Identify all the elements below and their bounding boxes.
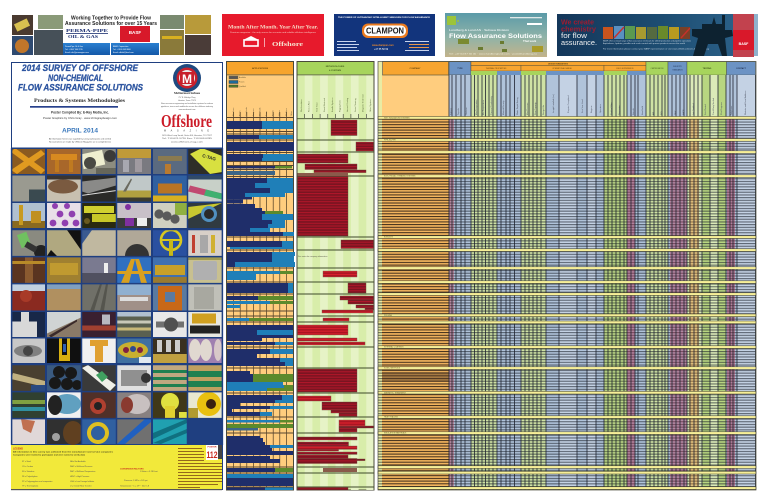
banner: BASF chemistry advert: Asphaltene, hydrate, paraffin and scale control with proven products across the world: [603, 42, 685, 45]
table section labels: [384, 116, 416, 435]
banner: BASF chemistry advert: chemistry: [561, 24, 597, 34]
orange chart key: Proven: [239, 80, 244, 84]
conversion factors: 1 Meter = 3.28 Feet: [140, 470, 158, 473]
banner: BASF chemistry advert: assurance.: [561, 40, 597, 47]
date: APRIL 2014: [62, 128, 98, 134]
legend abbreviations: HPHT = High Pressure: [70, 475, 89, 478]
table header: orange groups: FIELD EXPERIENCE: [616, 68, 634, 70]
orange chart bars: blue tails: [227, 121, 295, 490]
photo row 5: [11, 257, 222, 283]
table vertical grid: [449, 75, 756, 490]
banner: Perma-Pipe and BASF advert: Tel: +1 800 543 8800: [113, 49, 131, 51]
orange chart bars: navy and blue rows: [227, 121, 294, 490]
green chart column labels: [300, 94, 372, 112]
table outer border: [378, 62, 756, 490]
logo: Offshore magazine: Tel: 713.621.9720 Fax: 713.963.6285: [162, 138, 212, 140]
orange chart column labels: Spools: [273, 110, 275, 116]
table column labels: Length Installed (km): [552, 94, 555, 113]
green chart column labels: Direct Electrical: [323, 98, 326, 112]
orange chart header: [227, 62, 293, 75]
photo row 8: [11, 338, 222, 363]
disclaimer: No warranties are made by Offshore Magazine as to completeness: [49, 141, 111, 144]
table column labels: Flow Capacity: [534, 102, 537, 115]
table header: green and blue sub groups: [471, 71, 646, 75]
table header: right groups: STANDARDS: [672, 68, 684, 72]
logo: sponsor badge: www.mcdermott.com: [179, 108, 196, 111]
green chart column labels: Internal Coating: [346, 98, 349, 112]
table header: orange groups: OPERATIONAL RANGE: [552, 67, 573, 70]
orange chart column labels: Jumpers: [253, 108, 255, 116]
conversion factors: [120, 468, 158, 488]
table column labels: Third-Party Verified: [712, 98, 715, 115]
heading: survey title: NON-CHEMICAL: [48, 73, 103, 83]
banner: Offshore magazine advert: [222, 14, 324, 56]
banner: Perma-Pipe and BASF advert: PERMA-PIPE: [66, 28, 108, 33]
table column labels: Projects Completed: [567, 96, 570, 113]
legend abbreviations: [22, 460, 95, 488]
banner: ClampOn advert: [334, 14, 435, 56]
table column labels: Min Temperature: [482, 99, 485, 115]
green chart column labels: Magnetic Treatment: [362, 94, 365, 112]
table column labels: Max Pressure: [527, 102, 529, 115]
poster credits: [43, 110, 117, 120]
logo: Offshore magazine: MAGAZINE: [164, 130, 209, 132]
banner: Flow Assurance Solutions advert: Lundberg & Lund AS · Subsea Division: [449, 29, 510, 32]
disclaimer: All information herein was supplied by survey participants and verified: [49, 138, 111, 140]
legend abbreviations: WHP = Wellhead Pressure: [70, 465, 92, 468]
table column labels: Onshore: [466, 106, 468, 115]
table column labels: Subsea: [450, 107, 452, 115]
poster credits: Poster Compiled By: E-Ray Media, Inc.: [51, 110, 109, 114]
table section labels: BUNDLES: [384, 237, 394, 239]
orange chart column labels: Umbilicals: [246, 107, 248, 116]
green chart red bars: [298, 120, 374, 490]
banner: BASF chemistry advert: [557, 14, 758, 57]
logo: sponsor badge: 757 N. Eldridge Pkwy: [178, 97, 196, 99]
orange chart key: [229, 76, 246, 88]
logo: Offshore magazine: 1455 West Loop South, Suite 400, Houston, TX 77027: [162, 134, 212, 137]
legend abbreviations: U = Overall Heat Transfer: [70, 484, 92, 488]
table column labels: Field Tested: [704, 104, 707, 115]
banner: Perma-Pipe and BASF advert: BASF Corporation: [113, 45, 128, 48]
logo: sponsor badge: Flow assurance engineering and installation systems for subsea: [161, 102, 213, 105]
orange chart column labels: Other: [290, 111, 293, 116]
table header: orange groups: THERMAL PROPERTIES: [486, 67, 507, 70]
legend abbreviations: ST = Steel: [22, 460, 31, 463]
table column labels: Operators: [599, 104, 602, 113]
logo: sponsor badge: pipelines, risers and umbilicals across the offshore industry: [161, 105, 213, 108]
table header: right groups: [646, 62, 756, 75]
panel: comparison table: [378, 62, 756, 490]
legend heading: LEGEND: [13, 448, 23, 450]
green chart section dividers: [297, 119, 374, 487]
green chart header: & SYSTEMS: [329, 70, 342, 72]
notes column: [178, 448, 222, 488]
photo row 9: [11, 365, 222, 391]
legend notes: [13, 450, 113, 456]
photo row 10: [11, 392, 222, 418]
table column labels: First Year Used: [581, 99, 584, 113]
banner: BASF chemistry advert: BASF offers a broad range of flow assurance chemicals for oilfield production and pipeline operations: [603, 40, 691, 43]
table row label column: [378, 62, 449, 490]
table header: right groups: CERTIFICATION: [651, 67, 664, 70]
table section labels: MAGNETIC TREATMENT: [384, 391, 407, 394]
table column labels: Topside: [458, 107, 460, 115]
photo row 11: [11, 419, 187, 445]
table header: company: COMPANY: [409, 67, 421, 70]
orange chart column labels: [233, 107, 293, 116]
banner: Flow Assurance Solutions advert: That work: [523, 39, 537, 43]
table column labels: Shallow Water: [610, 102, 613, 115]
table column labels: Max Temperature: [475, 99, 478, 115]
table section labels: SONIC METHODS: [384, 368, 401, 370]
green chart note: See notes for company information: [298, 255, 327, 258]
photo row 7: [11, 312, 222, 338]
table section labels: PIGGING: [384, 315, 393, 317]
panel: poster cover: [11, 62, 223, 490]
table column labels: Material Density: [502, 101, 505, 115]
table columns: [449, 75, 756, 490]
poster number: 112: [206, 449, 218, 460]
table section labels: HEAT TRACING: [384, 416, 398, 419]
photo row 4: [11, 230, 222, 259]
logo: Offshore magazine: [161, 111, 212, 143]
heading: survey title: FLOW ASSURANCE SOLUTIONS: [18, 82, 144, 92]
green chart header: METHODOLOGIES: [326, 66, 345, 68]
table section labels: INTERNAL COATINGS: [384, 346, 404, 349]
banner: Perma-Pipe and BASF advert: Email: info@permapipe.com: [65, 51, 89, 54]
table column labels: New Build: [642, 106, 644, 115]
green chart muted rows: [298, 173, 357, 472]
table column labels: Website and Email Address: [744, 91, 747, 115]
green chart column labels: Other Systems: [369, 99, 372, 112]
banner: Perma-Pipe and BASF advert: Email: oilfield@basf.com: [113, 52, 134, 54]
photo row 2: [11, 176, 222, 202]
banner: ClampOn advert: THE POWER OF ULTRASONIC INTELLIGENT SENSORS FOR FLOW ASSURANCE: [338, 16, 431, 19]
green chart ticks: [305, 114, 366, 118]
table column labels: Regions: [591, 106, 593, 113]
table column labels: [450, 91, 747, 115]
banner: BASF chemistry advert: BASF: [739, 42, 749, 46]
table header: first blue group: [449, 62, 471, 75]
conversion factors: Pressure: 1 MPa = 145 psi: [124, 480, 148, 482]
orange chart column labels: Wellbore: [286, 107, 288, 116]
orange chart key: Available: [239, 76, 246, 79]
banner: Perma-Pipe and BASF advert: PermaPipe Oil & Gas: [65, 45, 83, 48]
banner: BASF chemistry advert: for flow: [561, 33, 588, 40]
table row stripes: [449, 118, 756, 490]
photo row 3: [11, 203, 222, 228]
orange chart bars: slate rows: [227, 171, 275, 430]
banner: Perma-Pipe and BASF advert: BASF: [129, 30, 141, 35]
photo row 1: [11, 148, 222, 174]
table column labels: Pilot Programs: [720, 102, 723, 115]
green chart column stripes: [305, 75, 374, 490]
conversion factors: CONVERSION FACTORS: [120, 468, 144, 470]
banner: Flow Assurance Solutions advert: Tel: +47 64 87 56 00 · www.lundberglund.com · post@lundberg.no: [449, 52, 538, 56]
table column labels: Design Life: [543, 104, 545, 115]
banner: Perma-Pipe and BASF advert: Assurance Solutions for over 15 Years: [65, 21, 157, 27]
orange chart column labels: Manifolds: [259, 107, 261, 116]
legend abbreviations: PE = Polyethylene: [22, 475, 38, 478]
heading: survey title: [18, 63, 144, 92]
green chart column labels: Bundle Systems: [331, 98, 334, 112]
legend abbreviations: PP = Polypropylene and composites: [22, 480, 52, 483]
panel: orange chart: [226, 62, 295, 490]
poster number: [206, 445, 222, 460]
legend abbreviations: CS = Carbon: [22, 465, 33, 468]
table section labels: WET INSULATION SYSTEMS: [384, 116, 410, 119]
table column labels: Deepwater: [618, 105, 621, 115]
photo row 1: C-TAG: [202, 153, 217, 162]
disclaimer: [49, 138, 111, 144]
table column labels: Retrofit: [632, 108, 635, 115]
legend notes: Companies were invited to participate and were asked to verify data: [13, 454, 86, 456]
green chart column labels: Wet Insulation: [300, 99, 303, 112]
banner: ClampOn advert: www.clampon.com: [372, 44, 394, 47]
banner: ClampOn advert: +47 55 58 99: [374, 48, 389, 51]
table header: orange groups: [471, 62, 646, 71]
orange chart key: Qualified: [239, 86, 246, 88]
table header: first blue group: TYPE: [457, 68, 463, 70]
table header: right groups: INDUSTRY: [673, 66, 683, 68]
banner: Flow Assurance Solutions advert: [445, 13, 547, 57]
table section labels: PIPE-IN-PIPE: [384, 140, 397, 142]
green chart column labels: Sonic Cleaning: [355, 99, 357, 112]
photo row 6: [11, 284, 222, 311]
orange chart header: APPLICATIONS: [252, 67, 269, 70]
banner: Offshore magazine advert: Offshore: [272, 41, 303, 48]
table section labels: ELECTRICALLY HEATED SYSTEMS: [384, 175, 416, 178]
banner: Perma-Pipe and BASF advert: Tel: +1 847 966 2235: [65, 49, 83, 51]
subtitle: Products & Systems Methodologies: [34, 98, 125, 104]
legend abbreviations: WHT = Wellhead Temperature: [70, 470, 95, 473]
legend abbreviations: NA = Not Available: [70, 460, 86, 463]
legend notes: All information in this survey was collected from the manufacturer and service companies: [13, 450, 113, 454]
banner: Perma-Pipe and BASF advert: Working Together to Provide Flow: [71, 16, 152, 22]
heading: survey title: 2014 SURVEY OF OFFSHORE: [21, 63, 139, 73]
logo: sponsor badge: [161, 64, 213, 111]
banner: ClampOn advert: CLAMPON: [366, 26, 404, 35]
table section rows: [378, 116, 756, 489]
green chart column labels: Pipe-in-Pipe: [309, 100, 311, 112]
table header: company: [382, 62, 448, 75]
banner: BASF chemistry advert: We create: [561, 18, 594, 26]
legend abbreviations: SS = Stainless: [22, 470, 34, 473]
green chart bright red bars: [298, 271, 373, 449]
logo: sponsor badge: Houston, Texas 77079: [178, 99, 196, 102]
logo: sponsor badge: McDermott Subsea: [174, 91, 201, 95]
logo: Offshore magazine: Offshore: [161, 111, 212, 131]
table column labels: Water Depth Rating: [516, 98, 519, 115]
banner: Offshore magazine advert: Premium magazine · the only source for accurate and reliable offshore intelligence: [230, 31, 316, 34]
table header: orange groups: DESIGN PARAMETERS: [548, 62, 569, 65]
table column labels: Telephone: [731, 105, 733, 115]
photo grid: [11, 148, 223, 445]
legend abbreviations: LDHI = Low Dosage Inhibitor: [70, 480, 95, 483]
orange chart column labels: Flowlines: [233, 108, 235, 116]
logo: Offshore magazine: www.offshore-mag.com: [171, 141, 204, 143]
table column labels: Lab Qualified: [693, 103, 695, 115]
panel: green chart: [297, 62, 374, 490]
orange chart column labels: Risers: [240, 110, 242, 116]
green chart column labels: Pigging Tools: [340, 100, 342, 112]
conversion factors: Temperature: °C = (°F − 32) / 1.8: [120, 484, 150, 488]
table section labels: INSULATION MATERIALS: [384, 432, 407, 435]
legend: yellow notes box: [11, 445, 222, 490]
legend abbreviations: TP = Thermoplastic: [22, 484, 38, 488]
table column labels: DNV: [675, 110, 677, 115]
table column labels: Thermal Conductivity: [490, 96, 493, 115]
banner: Perma-Pipe and BASF advert: [12, 14, 212, 56]
orange chart column labels: Trees: [266, 111, 268, 116]
green chart column labels: Heat Trace: [315, 101, 318, 112]
logo: sponsor badge: M: [182, 72, 192, 86]
orange chart grid: [234, 118, 286, 490]
table colored column highlights: [449, 118, 735, 490]
table column labels: ISO: [661, 111, 663, 115]
orange chart bars: green tails: [227, 166, 293, 472]
orange chart column labels: Valves: [279, 110, 281, 116]
banner: Offshore magazine advert: Month After Month. Year After Year.: [228, 26, 318, 30]
banner: Flow Assurance Solutions advert: Flow Assurance Solutions: [449, 33, 542, 40]
table column labels: NACE: [682, 109, 685, 115]
poster credits: Poster Graphics by Chris Gray · www.chrisgraydesign.com: [43, 116, 117, 120]
table header: right groups: TESTING: [703, 68, 712, 70]
table column labels: API: [652, 111, 655, 115]
subtitle rule: [30, 106, 118, 108]
banner: BASF chemistry advert: For more information please contact your BASF representative or visit www.oilfield-solutions.basf.com today: [603, 48, 709, 51]
green chart header: [298, 62, 374, 75]
poster number: POSTER: [208, 447, 217, 449]
banner: Perma-Pipe and BASF advert: OIL & GAS: [68, 34, 99, 39]
table header: right groups: CONTACT: [736, 67, 747, 70]
